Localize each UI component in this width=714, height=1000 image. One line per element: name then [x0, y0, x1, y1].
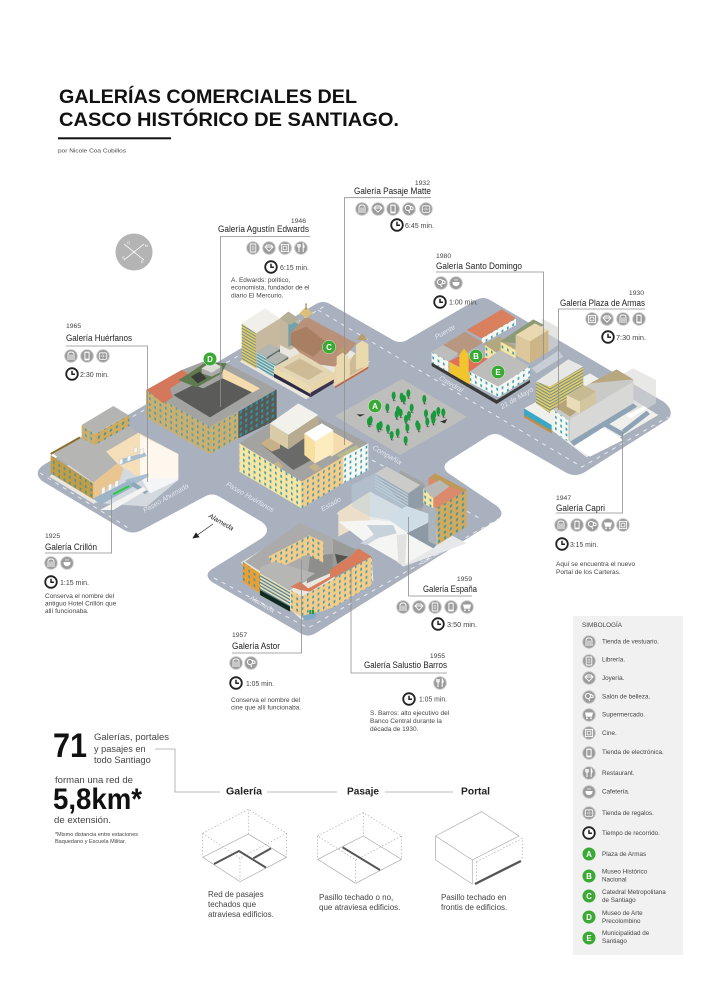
stats block: y pasajes en — [94, 744, 146, 754]
callout: Galería Plaza de Armas: Galería Plaza de Armas — [560, 298, 646, 308]
callout: Galería Plaza de Armas — [560, 290, 646, 343]
leader lines — [45, 198, 645, 673]
compass: N — [145, 243, 148, 248]
plaza de armas — [335, 379, 467, 455]
callout: Galería Agustín Edwards: economista, fundador de el — [231, 284, 310, 292]
connector line to types — [155, 749, 453, 792]
panel: simbología legend: Librería. — [602, 656, 625, 664]
road network — [38, 298, 671, 636]
caption: pasaje: Pasillo techado o no, — [319, 893, 393, 902]
panel: simbología legend: Restaurant. — [602, 770, 635, 777]
callout: Galería Agustín Edwards — [218, 218, 310, 299]
block: Central building on Estado — [239, 403, 368, 508]
panel: simbología legend: Tienda de regalos. — [602, 810, 654, 817]
panel: simbología legend: Cine. — [602, 730, 617, 737]
stats block: Galerías, portales — [94, 732, 169, 742]
block: Santo Domingo and Municipalidad — [432, 309, 563, 404]
heading: Pasaje: Pasaje — [347, 786, 379, 798]
stats block: *Mismo distancia entre estaciones — [55, 832, 139, 838]
street names — [142, 324, 535, 615]
callout: Galería Crillón: allí funcionaba. — [45, 608, 89, 615]
compass: O — [127, 240, 130, 245]
panel: simbología legend: Cafetería. — [602, 788, 630, 796]
panel: simbología legend: Museo de Arte — [602, 910, 643, 917]
callout: Galería Capri: 1947 — [556, 495, 571, 502]
road lane dashes — [40, 306, 668, 628]
callout: Galería Crillón — [45, 533, 117, 615]
stats block: 5,8km* — [53, 783, 142, 816]
callout: Galería España — [397, 576, 477, 630]
callout: Galería Santo Domingo — [434, 253, 522, 308]
compass: S — [122, 255, 125, 260]
block: Astor — [241, 523, 373, 621]
panel: simbología legend: Supermercado. — [602, 712, 645, 718]
callout: Galería Capri: 3:15 min. — [570, 542, 598, 549]
map markers — [203, 340, 505, 413]
panel: simbología legend: SIMBOLOGÍA — [582, 622, 622, 629]
panel: simbología legend: Catedral Metropolitana — [602, 889, 666, 896]
callout: Galería Crillón: 1925 — [45, 533, 60, 540]
marker A: A — [372, 402, 378, 411]
block: Plaza de Armas and Capri — [524, 359, 658, 457]
panel: simbología legend: Tienda de electrónica. — [602, 749, 664, 756]
panel: simbología legend: Precolombino — [602, 918, 641, 925]
callout: Galería Capri: Galería Capri — [556, 503, 605, 513]
callout: Galería Astor: Galería Astor — [232, 641, 280, 651]
callout: Galería Crillón: 1:15 min. — [60, 580, 89, 587]
callout: Galería Astor: 1957 — [232, 632, 247, 639]
callout: Galería Santo Domingo: 1:00 min. — [449, 300, 478, 306]
callout: Galería Santo Domingo: 1980 — [436, 253, 451, 260]
caption: pasaje: que atraviesa edificios. — [319, 903, 400, 912]
callout: Galería Salustio Barros: Banco Central durante la — [370, 718, 442, 725]
panel: simbología legend: A — [586, 850, 592, 859]
callout: Galería Plaza de Armas: 1930 — [629, 290, 644, 297]
callout: Galería Huérfanos: Galería Huérfanos — [66, 333, 133, 343]
title rule — [58, 137, 171, 139]
callout: Galería Salustio Barros: 1:05 min. — [419, 696, 447, 704]
callout: Galería Huérfanos: 1965 — [66, 323, 81, 330]
callout: Galería Agustín Edwards: 6:15 min. — [280, 265, 309, 272]
street names: Paseo Huérfanos — [225, 481, 275, 515]
callout: Galería Agustín Edwards: 1946 — [291, 218, 306, 225]
callout: Galería Pasaje Matte — [354, 180, 434, 231]
callout: Galería Capri: Portal de los Carteras. — [556, 569, 621, 576]
callout: Galería Santo Domingo: Galería Santo Domingo — [436, 261, 522, 271]
marker D: D — [207, 355, 213, 364]
caption: galería: Red de pasajes — [208, 890, 264, 899]
callout: Galería Capri — [555, 495, 636, 576]
stats block: Baquedano y Escuela Militar. — [55, 839, 126, 845]
callout: Galería Pasaje Matte: 6:45 min. — [405, 223, 434, 230]
heading: Galería: Galería — [226, 786, 262, 798]
diagram: pasaje — [318, 813, 402, 883]
diagram: galería — [203, 809, 287, 882]
diagram: portal — [436, 812, 522, 884]
panel: simbología legend: Salón de belleza. — [602, 694, 651, 700]
callout: Galería Crillón: Galería Crillón — [45, 542, 97, 552]
callout: Galería Astor: 1:05 min. — [246, 681, 274, 688]
compass: E — [141, 259, 144, 264]
callout: Galería Huérfanos — [65, 323, 133, 380]
callout: Galería Agustín Edwards: Galería Agustín Edwards — [218, 224, 310, 234]
callout: Galería Capri: Aquí se encuentra el nuevo — [556, 561, 636, 568]
panel: simbología legend: Tienda de vestuario. — [602, 638, 659, 646]
marker B: B — [473, 352, 479, 361]
stats block: de extensión. — [54, 815, 111, 825]
marker E — [491, 365, 505, 379]
heading: Portal: Portal — [461, 786, 490, 798]
caption: pasaje — [319, 893, 400, 912]
plaza trees — [357, 389, 447, 446]
street names: Alameda — [247, 594, 276, 615]
panel: simbología legend: E — [586, 934, 592, 943]
title: CASCO HISTÓRICO DE SANTIAGO. — [59, 107, 399, 131]
street names: Catedral — [438, 375, 464, 395]
caption: portal: Pasillo techado en — [441, 893, 506, 902]
panel: simbología legend — [573, 616, 683, 955]
panel: simbología legend: Tiempo de recorrido. — [602, 830, 660, 837]
callout: Galería Astor: cine que allí funcionaba. — [231, 704, 301, 712]
block: España — [337, 467, 467, 567]
title — [59, 85, 399, 131]
city map — [38, 198, 671, 673]
marker C: C — [326, 343, 332, 352]
street names: Paseo Ahumada — [142, 483, 190, 515]
callout: Galería Agustín Edwards: A. Edwards: político, — [231, 277, 290, 284]
street names: Estado — [320, 496, 343, 513]
callout: Galería Salustio Barros: 1955 — [430, 653, 445, 660]
stats block — [53, 727, 169, 845]
caption: portal — [441, 893, 507, 912]
street names: San Antonio — [419, 541, 455, 566]
panel: simbología legend: Joyería. — [602, 675, 625, 682]
callout: Galería Plaza de Armas: 7:30 min. — [616, 335, 646, 342]
panel: simbología legend: de Santiago — [602, 897, 636, 904]
Alameda arrow label — [193, 512, 235, 538]
block: Huérfanos with Museo Precolombino — [146, 362, 277, 454]
panel: simbología legend: Nacional — [602, 876, 627, 884]
caption: galería — [208, 890, 274, 919]
street names: 21 de Mayo — [499, 386, 535, 411]
callout: Galería Astor: Conserva el nombre del — [231, 697, 301, 704]
callout: Galería España: 3:50 min. — [447, 622, 477, 629]
callout: Galería Salustio Barros: Galería Salustio Barros — [364, 660, 448, 670]
panel: simbología legend: Santiago — [602, 938, 627, 945]
callout: Galería Crillón: Conserva el nombre del — [45, 593, 115, 600]
callout: Galería Agustín Edwards: diario El Mercurio. — [231, 292, 284, 299]
street names: Compañía — [371, 445, 403, 467]
callout: Galería España: 1959 — [457, 576, 472, 583]
marker A — [368, 399, 382, 413]
callout: Galería Salustio Barros: década de 1930. — [370, 726, 419, 733]
stats block: forman una red de — [55, 775, 133, 785]
callout: Galería Pasaje Matte: 1932 — [415, 180, 430, 187]
caption: galería: atraviesa edificios. — [208, 910, 274, 919]
street names: Puente — [434, 324, 457, 341]
Alameda arrow label: Alameda — [206, 512, 235, 533]
panel: simbología legend: Plaza de Armas — [602, 851, 646, 858]
callout: Galería Astor — [230, 632, 301, 712]
callout: Galería Crillón: antiguo Hotel Crillón que — [45, 600, 117, 608]
panel: simbología legend: C — [586, 892, 592, 901]
compass — [116, 234, 152, 270]
marker D — [203, 352, 217, 366]
stats block: todo Santiago — [94, 755, 151, 765]
stats block: 71 — [53, 727, 87, 765]
byline: por Nicole Coa Cubillos — [58, 148, 126, 154]
caption: galería: techados que — [208, 900, 257, 909]
callout: Galería Huérfanos: 2:30 min. — [80, 372, 109, 379]
marker B — [469, 349, 483, 363]
panel: simbología legend: Museo Histórico — [602, 868, 648, 876]
callout: Galería Pasaje Matte: Galería Pasaje Matte — [354, 186, 431, 196]
marker E: E — [495, 368, 501, 377]
panel: simbología legend: Municipalidad de — [602, 930, 650, 937]
title: GALERÍAS COMERCIALES DEL — [59, 85, 357, 108]
block: Crillón — [49, 406, 178, 510]
panel: simbología legend: B — [586, 872, 592, 881]
panel: simbología legend: D — [586, 913, 592, 922]
callout: Galería España: Galería España — [423, 584, 477, 594]
block: Agustín Edwards and Catedral — [240, 303, 370, 399]
caption: portal: frontis de edificios. — [441, 903, 507, 912]
marker C — [322, 340, 336, 354]
callout: Galería Salustio Barros — [364, 653, 450, 733]
callout: Galería Salustio Barros: S. Barros: alto ejecutivo del — [370, 710, 450, 717]
